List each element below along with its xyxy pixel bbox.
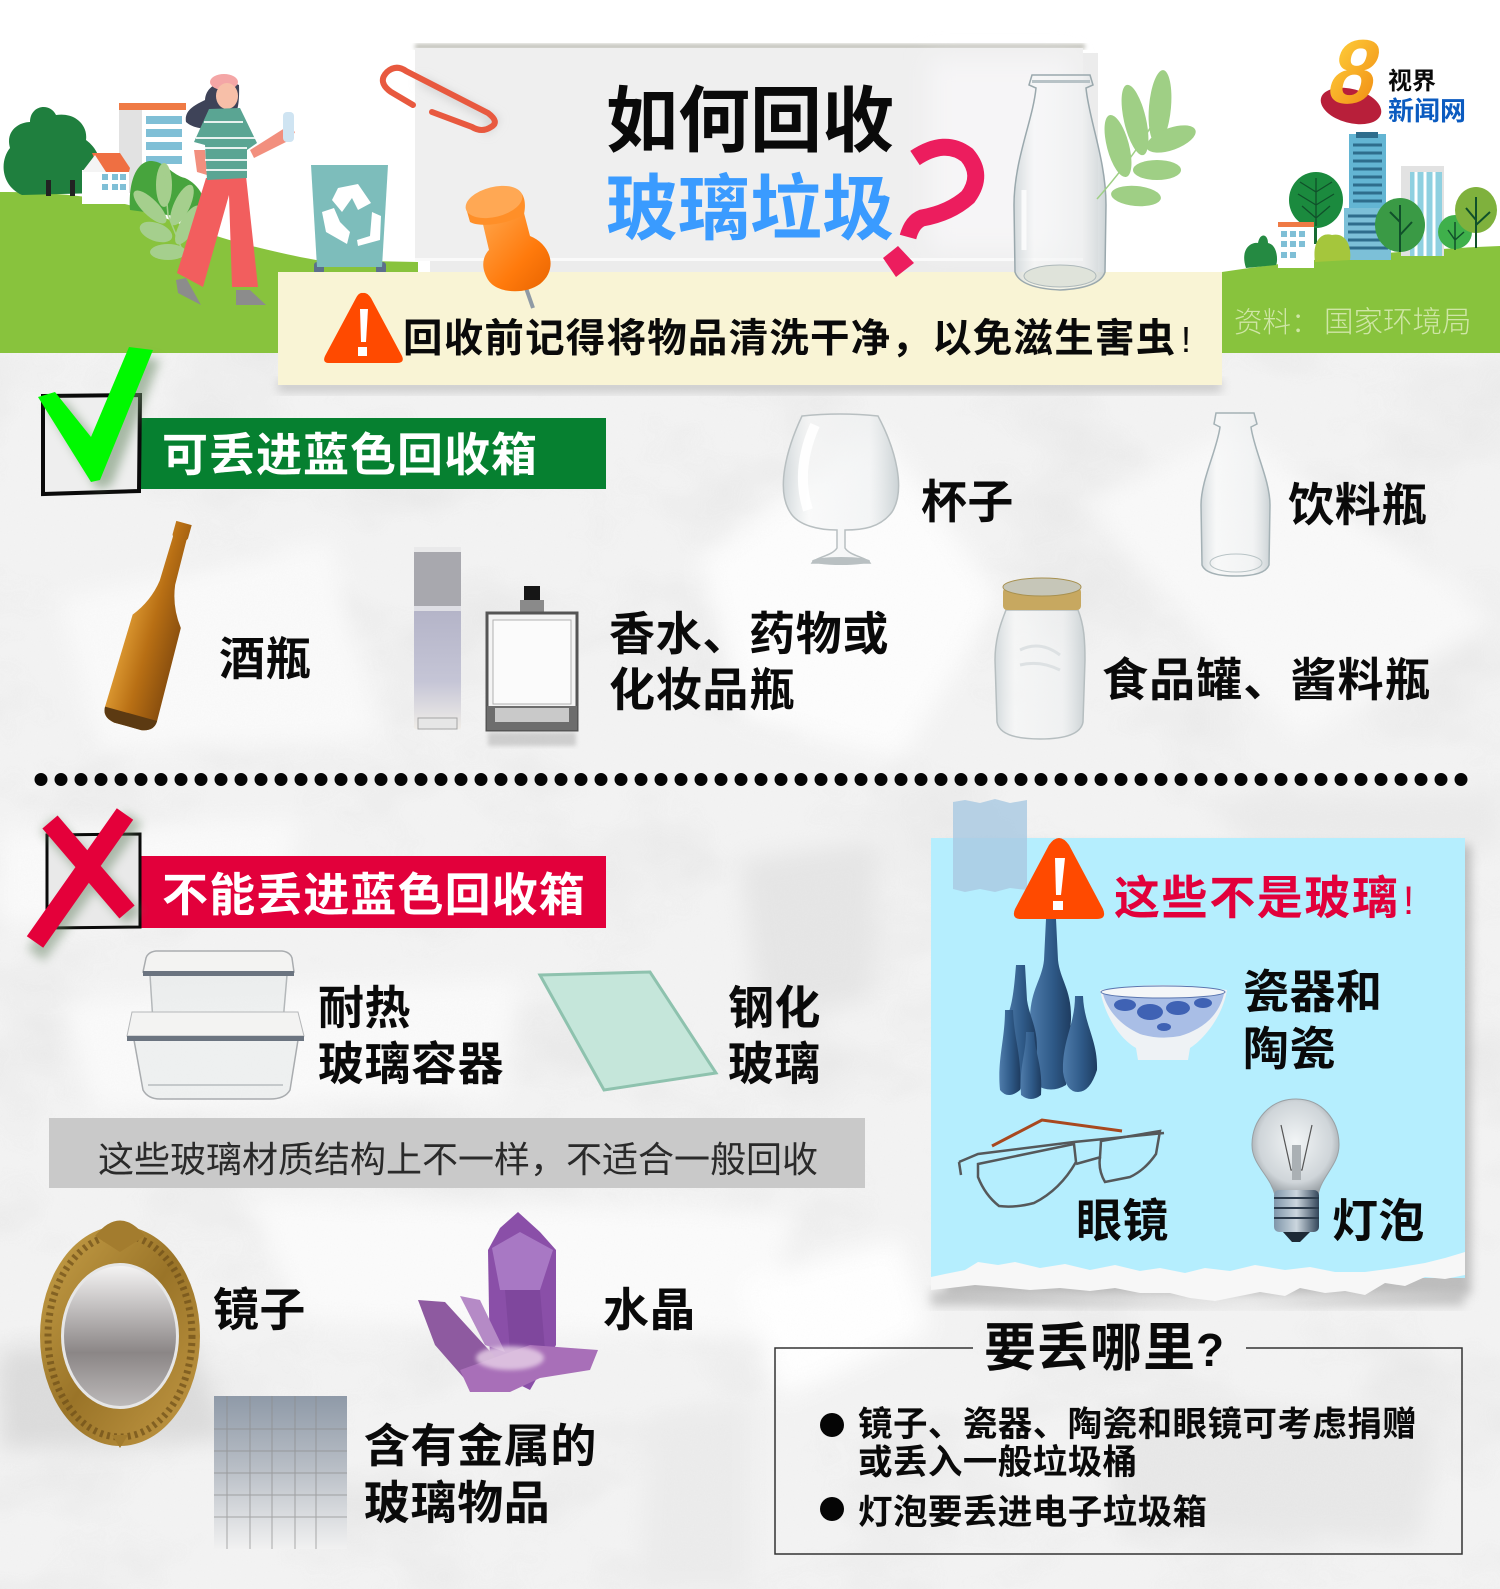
source text: 资料： <box>1234 307 1320 339</box>
item: goblet <box>783 414 899 565</box>
logo <box>1317 21 1466 130</box>
label: mirror: 镜子 <box>213 1284 306 1336</box>
icon: right leaf branch <box>1097 69 1199 208</box>
bullet 1 text: 或丢入一般垃圾桶 <box>858 1444 1138 1482</box>
blue paper <box>931 838 1465 1278</box>
label: glass items containing metal: 玻璃物品 <box>364 1477 550 1529</box>
item: ornate mirror <box>40 1220 200 1448</box>
panel heading: 这些不是玻璃 <box>1114 872 1400 924</box>
logo: 新闻网 <box>1388 96 1466 126</box>
label: tempered glass: 钢化 <box>728 982 821 1034</box>
panel shadow <box>945 845 1471 1295</box>
left city: building, tree, house, bush <box>4 103 206 220</box>
label: heat-resistant glass containers <box>318 982 504 1090</box>
bullet 1 text <box>858 1406 1417 1482</box>
cross box <box>47 834 140 928</box>
heading text: 不能丢进蓝色回收箱 <box>162 869 586 921</box>
label: heat-resistant glass containers: 玻璃容器 <box>318 1038 504 1090</box>
item: tempered glass sheet <box>540 972 716 1090</box>
icon: warning triangle <box>324 293 403 363</box>
torn shadow <box>931 1290 1464 1306</box>
item: perfume bottle <box>487 586 577 746</box>
label: food jars and sauce bottles: 食品罐、酱料瓶 <box>1102 654 1432 706</box>
title: 玻璃垃圾 <box>606 170 894 250</box>
label: glass items containing metal: 含有金属的 <box>364 1420 597 1472</box>
title <box>606 82 894 250</box>
icon: tape <box>953 799 1027 892</box>
label: perfume, medicine or cosmetics bottles: 化妆品瓶 <box>609 664 796 716</box>
right green hill <box>1222 246 1500 353</box>
panel heading: ! <box>1403 879 1416 923</box>
panel: can go into blue bin header <box>38 347 606 494</box>
item: metal-wired glass <box>214 1396 347 1549</box>
item: glass jar <box>995 578 1085 739</box>
label: drink bottle: 饮料瓶 <box>1288 479 1428 531</box>
item: amethyst crystal <box>418 1212 598 1392</box>
box outline <box>775 1348 1462 1554</box>
label: crystal: 水晶 <box>603 1284 696 1336</box>
panel: where to dispose <box>775 1320 1462 1554</box>
item: cosmetic pump bottle <box>414 547 461 729</box>
item: beer bottle <box>102 516 210 734</box>
checkbox <box>43 395 140 494</box>
source text: 国家环境局 <box>1324 306 1472 339</box>
label: wine bottle: 酒瓶 <box>219 633 312 685</box>
panel heading: 要丢哪里? <box>984 1320 1225 1378</box>
label: porcelain and ceramics: 瓷器和 <box>1243 966 1382 1018</box>
label: heat-resistant glass containers: 耐热 <box>318 982 411 1034</box>
logo: 视界 <box>1388 68 1436 95</box>
icon: warning triangle, panel <box>1014 838 1104 919</box>
icon: left leaf branch <box>129 163 206 262</box>
label: perfume, medicine or cosmetics bottles: 香水、药物或 <box>609 608 889 660</box>
panel: title paper <box>415 44 1085 261</box>
label: tempered glass <box>728 982 821 1090</box>
icon: glass milk bottle <box>1014 75 1106 290</box>
icon: orange push pin <box>462 180 551 308</box>
green banner <box>140 418 606 489</box>
panel: cannot go into blue bin header <box>35 814 606 955</box>
callout text: 回收前记得将物品清洗干净，以免滋生害虫 <box>403 317 1176 361</box>
title: 如何回收 <box>606 82 894 162</box>
panel: title paper back sheet <box>430 53 1098 275</box>
cross mark <box>35 814 127 942</box>
left green hill <box>0 192 418 353</box>
label: porcelain and ceramics: 陶瓷 <box>1243 1023 1336 1075</box>
item: blue and white porcelain bowl <box>1100 985 1227 1060</box>
label: tempered glass: 玻璃 <box>728 1038 821 1090</box>
dotted divider <box>41 773 1465 786</box>
bullet 2 text: 灯泡要丢进电子垃圾箱 <box>858 1494 1208 1532</box>
logo: 8 <box>1319 21 1391 122</box>
item: eyeglasses <box>959 1120 1164 1207</box>
callout text: ! <box>1181 319 1192 360</box>
label: cup: 杯子 <box>921 476 1014 528</box>
torn white edge <box>931 1252 1465 1301</box>
item: drink bottle <box>1201 413 1270 576</box>
panel: these are not glass <box>931 838 1471 1306</box>
label: glasses: 眼镜 <box>1076 1195 1169 1247</box>
label: perfume, medicine or cosmetics bottles <box>609 608 889 716</box>
icon: question mark <box>883 147 976 277</box>
cross shadow <box>36 818 134 955</box>
callout panel: clean before recycling <box>278 272 1222 392</box>
heading text: 可丢进蓝色回收箱 <box>162 429 538 481</box>
item: light bulb <box>1252 1099 1339 1242</box>
icon: paperclip <box>383 68 495 132</box>
note bar: different glass structure: 这些玻璃材质结构上不一样，不适合一般回收 <box>98 1139 818 1180</box>
item: blue vases <box>999 919 1097 1099</box>
label: light bulb: 灯泡 <box>1332 1195 1425 1247</box>
check mark <box>38 347 153 482</box>
red banner <box>140 856 606 928</box>
bullet 1 text: 镜子、瓷器、陶瓷和眼镜可考虑捐赠 <box>858 1406 1417 1444</box>
note bar: different glass structure <box>49 1118 865 1188</box>
check mark shadow <box>46 355 160 490</box>
illustration: woman holding a bottle <box>176 74 295 305</box>
bullet 2 <box>820 1497 844 1521</box>
label: glass items containing metal <box>364 1420 597 1529</box>
label: porcelain and ceramics <box>1243 966 1382 1075</box>
right city: towers, trees, house <box>1244 132 1497 268</box>
icon: recycling bin <box>311 165 388 274</box>
bullet 1 <box>820 1413 844 1437</box>
item: heat-resistant glass containers <box>127 951 304 1099</box>
